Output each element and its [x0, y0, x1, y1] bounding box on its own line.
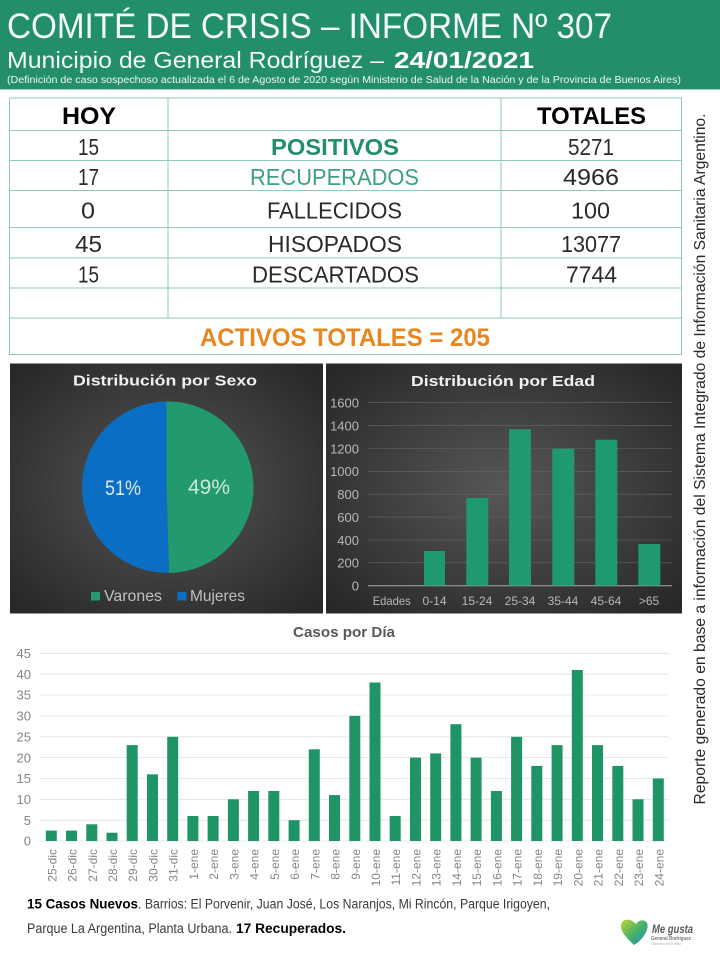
y axis labels: 20: [17, 750, 31, 765]
footer notes: . Barrios: El Porvenir, Juan José, Los Naranjos, Mi Rincón, Parque Irigoyen,: [138, 896, 550, 912]
row: fallecidos: [81, 198, 610, 224]
column header: totales: TOTALES: [537, 103, 646, 130]
daily cases chart: [17, 624, 669, 886]
logo municipality: General Rodríguez: [651, 936, 691, 942]
column header: hoy: HOY: [62, 103, 116, 130]
x axis labels: [373, 594, 660, 608]
x axis date labels: [45, 849, 666, 886]
x axis date labels: 26-dic: [66, 849, 80, 882]
x axis labels: Edades: [373, 594, 411, 608]
y axis labels: 45: [17, 646, 31, 661]
x axis date labels: 31-dic: [167, 849, 181, 882]
y axis labels: 35: [17, 688, 31, 703]
subtitle with municipality: Municipio de General Rodríguez –: [7, 47, 384, 73]
y axis labels: 1200: [330, 441, 359, 456]
row: descartados: 7744: [566, 262, 617, 288]
x axis date labels: 21-ene: [592, 849, 606, 886]
heading: age chart: Distribución por Edad: [411, 373, 595, 390]
vertical source note: Reporte generado en base a información del Sistema Integrado de Información Sanitaria Argentino.: [692, 114, 709, 804]
y axis labels: 0: [24, 834, 31, 849]
x axis date labels: 14-ene: [450, 849, 464, 886]
x axis date labels: 28-dic: [106, 849, 120, 882]
logo: Me gusta General Rodríguez: [621, 920, 693, 946]
row: positivos: 15: [78, 134, 99, 160]
y axis labels: 1600: [330, 396, 359, 410]
report date: 24/01/2021: [394, 47, 534, 73]
x axis date labels: 3-ene: [227, 849, 241, 880]
row: recuperados: 17: [78, 164, 99, 190]
y axis labels: 600: [337, 510, 359, 525]
y axis labels: 40: [17, 667, 31, 682]
x axis date labels: 25-dic: [45, 849, 59, 882]
y axis labels: 5: [24, 813, 31, 828]
row: descartados: DESCARTADOS: [252, 262, 419, 288]
row: hisopados: 45: [75, 231, 102, 257]
x axis date labels: 24-ene: [652, 849, 666, 886]
row: descartados: [78, 262, 617, 288]
x axis date labels: 6-ene: [288, 849, 302, 880]
x axis labels: 45-64: [591, 594, 622, 608]
x axis date labels: 5-ene: [268, 849, 282, 880]
x axis labels: 15-24: [462, 594, 493, 608]
x axis date labels: 10-ene: [369, 849, 383, 886]
legend: Mujeres: [190, 588, 245, 605]
y axis labels: 10: [17, 792, 31, 807]
heading: sex chart: Distribución por Sexo: [73, 372, 257, 390]
x axis date labels: 4-ene: [248, 849, 262, 880]
footer notes: Parque La Argentina, Planta Urbana.: [27, 921, 232, 936]
y axis labels: [330, 396, 359, 594]
y axis labels: 15: [17, 771, 31, 786]
case definition note: (Definición de caso sospechoso actualizada el 6 de Agosto de 2020 según Ministerio de Salud de la Nación y de la Provincia de Buenos Aires): [7, 74, 681, 86]
x axis date labels: 13-ene: [430, 849, 444, 886]
x axis date labels: 20-ene: [571, 849, 585, 886]
row: positivos: [78, 134, 614, 160]
x axis labels: 0-14: [422, 594, 447, 608]
label: mujeres share: 51%: [105, 477, 141, 500]
x axis labels: 35-44: [548, 594, 579, 608]
heading: daily cases: Casos por Día: [293, 624, 396, 641]
x axis date labels: 1-ene: [187, 849, 201, 880]
x axis date labels: 15-ene: [470, 849, 484, 886]
y axis labels: 200: [337, 556, 359, 571]
row: fallecidos: FALLECIDOS: [267, 198, 402, 224]
x axis date labels: 17-ene: [511, 849, 525, 886]
y axis labels: 1000: [330, 464, 359, 479]
panel: distribution by age: [326, 364, 682, 614]
x axis date labels: 23-ene: [632, 849, 646, 886]
panel: distribution by sex: [10, 364, 323, 614]
x axis date labels: 9-ene: [349, 849, 363, 880]
x axis labels: >65: [639, 594, 660, 608]
x axis date labels: 22-ene: [612, 849, 626, 886]
row: descartados: 15: [78, 262, 99, 288]
row: recuperados: RECUPERADOS: [250, 164, 419, 190]
footer notes: [27, 896, 550, 936]
x axis date labels: 18-ene: [531, 849, 545, 886]
icon: heart: [621, 920, 648, 945]
footer notes: 17 Recuperados.: [236, 921, 346, 936]
x axis date labels: 7-ene: [308, 849, 322, 880]
x axis date labels: 30-dic: [146, 849, 160, 882]
row: fallecidos: 0: [81, 198, 95, 224]
summary table: [10, 98, 682, 354]
y axis labels: 1400: [330, 418, 359, 434]
legend: [91, 588, 245, 605]
row: recuperados: 4966: [563, 164, 619, 190]
x axis date labels: 12-ene: [410, 849, 424, 886]
x axis labels: 25-34: [505, 594, 536, 608]
y axis labels: 400: [337, 533, 359, 548]
row: hisopados: [75, 231, 621, 257]
row: fallecidos: 100: [571, 198, 610, 224]
pie chart: [82, 401, 254, 573]
x axis date labels: 29-dic: [126, 849, 140, 882]
y axis labels: [17, 646, 31, 849]
age bars: [424, 429, 660, 586]
x axis date labels: 11-ene: [389, 849, 403, 885]
active cases total: ACTIVOS TOTALES = 205: [200, 324, 490, 352]
row: hisopados: 13077: [561, 231, 621, 257]
y axis labels: 0: [352, 578, 359, 594]
y axis labels: 30: [17, 709, 31, 724]
y axis labels: 800: [337, 487, 359, 502]
x axis date labels: 27-dic: [86, 849, 100, 882]
row: hisopados: HISOPADOS: [268, 231, 402, 257]
logo wordmark: Me gusta: [652, 922, 693, 936]
footer notes: 15 Casos Nuevos: [27, 896, 138, 912]
x axis date labels: 8-ene: [328, 849, 342, 880]
daily bars: [46, 670, 664, 841]
y axis labels: 25: [17, 730, 31, 744]
header banner: [0, 0, 720, 90]
title: COMITÉ DE CRISIS – INFORME Nº 307: [7, 7, 612, 46]
x axis date labels: 2-ene: [207, 849, 221, 880]
legend: Varones: [104, 588, 162, 605]
row: positivos: 5271: [568, 134, 614, 160]
x axis date labels: 19-ene: [551, 849, 565, 886]
row: positivos: POSITIVOS: [271, 134, 399, 160]
label: varones share: 49%: [188, 476, 230, 499]
logo tagline: Gobierno del Pueblo: [651, 942, 681, 946]
row: recuperados: [78, 164, 619, 190]
x axis date labels: 16-ene: [490, 849, 504, 886]
